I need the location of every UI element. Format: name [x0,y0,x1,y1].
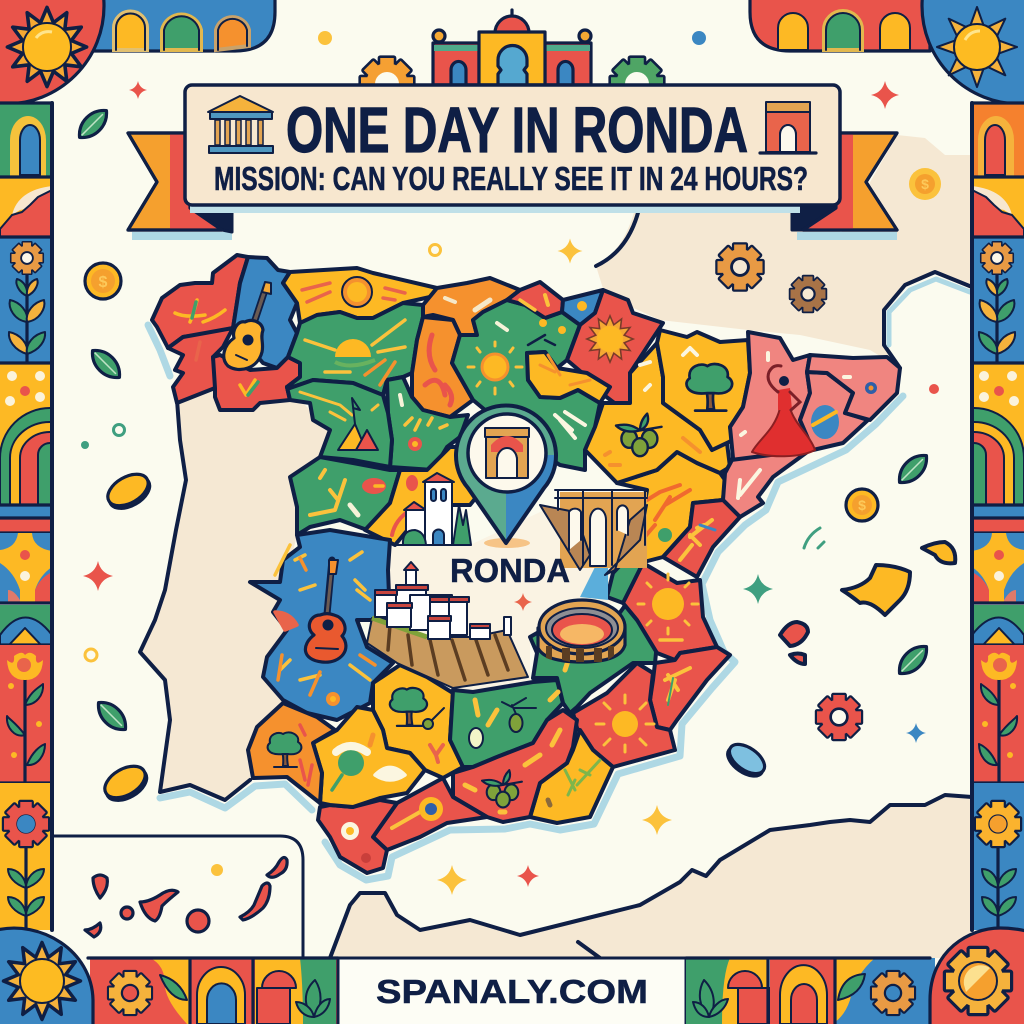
icon: sun on green region [468,342,522,394]
frame: right column middle tiles [972,237,1024,783]
icon: Puente Nuevo bridge [540,490,647,575]
frame: top-right sun corner [922,0,1024,104]
coins: $ [99,274,108,291]
frame: right column gear flower [972,783,1024,930]
icon: guitar south [305,560,346,662]
frame: top-right strip with arches [750,0,930,51]
frame: left column gear flower [0,783,52,930]
icon: rising sun on green region [335,339,375,366]
icon: sun on yellow region [342,277,372,307]
footer url: SPANALY.COM [376,973,648,1010]
label: RONDA: RONDA [450,552,570,589]
icon: olive branch north-east [616,414,662,456]
coins: $ [858,497,866,513]
icon: hill town cliff [367,562,528,688]
floating gears [715,242,863,741]
frame: bottom strip right [686,958,935,1024]
land: Portugal [140,388,330,800]
subtitle: MISSION: CAN YOU REALLY SEE IT IN 24 HOURS? [214,160,808,197]
icon: tree north-east [686,364,732,411]
frame: top-left sun corner [0,0,104,104]
land: France [596,135,972,368]
frame: bottom strip [88,958,338,1024]
icon: gate [760,102,816,153]
frame: left column middle tiles [0,237,52,783]
Canary islands inset [52,836,303,958]
tile: cross [0,533,52,603]
central cream land around Ronda [380,505,640,695]
title: ONE DAY IN RONDA [286,94,748,166]
map region decorations [175,283,877,863]
Balearic islands [780,542,955,664]
icon: guitar north [224,282,271,370]
footer box [338,958,686,1024]
frame: column inner borders [52,103,972,930]
frame: right column top tiles [972,103,1024,237]
land: North Africa [330,795,972,958]
frame: bottom-left sun corner [0,928,93,1024]
ribbon left [128,133,232,240]
icon: sun on red region [587,316,633,362]
icon: church [395,473,471,545]
header building [433,10,591,85]
icon: waterfall [580,562,608,600]
icon: location pin with gate [456,406,556,548]
sparkles and dots [81,31,939,895]
header gear left [358,55,416,113]
icon: sun on red east [638,574,698,634]
ribbon right [792,133,897,240]
icon: bullring colosseum [538,600,625,662]
leaves [73,104,933,736]
frame: bottom-right gear corner [930,928,1024,1024]
icon: olives on red region [482,770,522,807]
icon: sun on red south [596,695,654,752]
tile: rainbow arch [0,363,52,505]
tile: blue flower [0,237,52,363]
frame: top-left strip with arches [90,0,275,51]
map of Spain regions [152,255,900,873]
icon: olive on green region [469,698,536,748]
icon: tree Andalusia [390,688,427,726]
coins [85,168,941,807]
title banner [185,85,840,213]
tile: small arch [0,603,52,645]
tile: red tulip [0,645,52,783]
Canary island group [85,857,287,937]
header gear right [608,55,666,113]
frame: left column top tiles [0,103,52,237]
tile: stripes [0,505,52,533]
icon: small olive [423,708,444,729]
icon: tree south-west [268,732,301,767]
coastline strokes [140,205,972,958]
icon: tent with flag [338,398,378,450]
coins: $ [921,176,929,192]
sea shadow under the coast [148,279,970,880]
icon: temple [208,96,273,153]
icon: flamenco dancer [752,366,815,456]
